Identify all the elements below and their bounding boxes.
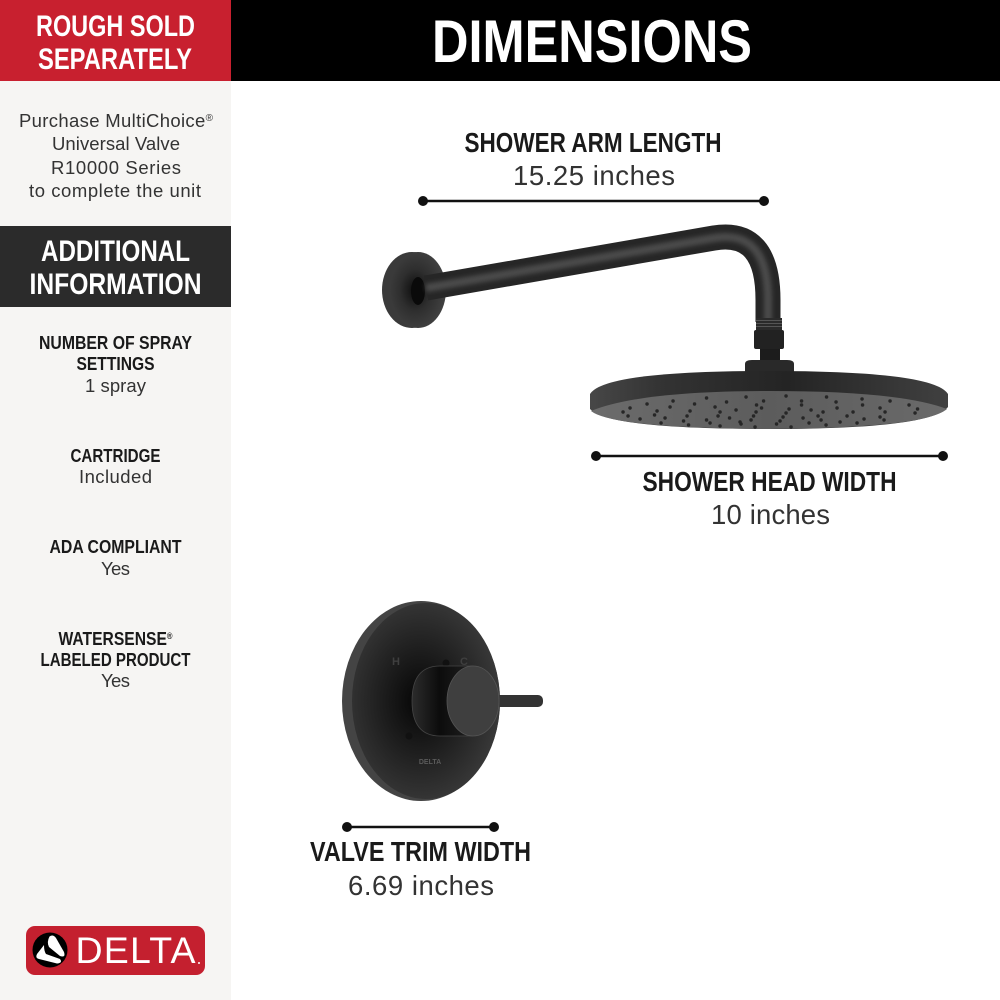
title banner: dimensions: DIMENSIONS (432, 8, 752, 75)
title banner: dimensions (231, 0, 1000, 81)
spec: watersense labeled product: WATERSENSE (58, 628, 187, 649)
dimension: shower arm length: 15.25 inches (513, 160, 675, 191)
wall flange (382, 252, 446, 328)
spray nozzles (623, 396, 918, 427)
dimension: shower head width (591, 451, 948, 530)
banner: rough sold separately: ROUGH SOLD (36, 10, 195, 43)
lever handle (495, 695, 543, 707)
plate markings (392, 656, 468, 766)
dimension: shower arm length: SHOWER ARM LENGTH (464, 127, 722, 158)
threaded connector (745, 318, 794, 372)
spec: cartridge: CARTRIDGE (70, 445, 160, 466)
screws (442, 660, 450, 666)
spec: number of spray settings: 1 spray (85, 375, 147, 396)
dimension: shower head width: 10 inches (711, 499, 830, 530)
shower head rim (590, 371, 948, 429)
plate markings: DELTA (419, 759, 441, 766)
spec: watersense labeled product: LABELED PRODUCT (40, 649, 191, 670)
spec: cartridge (70, 445, 160, 487)
spec: watersense labeled product: Yes (101, 670, 130, 691)
heading: additional information: ADDITIONAL (41, 235, 190, 268)
knob face (447, 666, 499, 736)
dimension: shower arm length (418, 127, 769, 206)
logo: delta (26, 926, 205, 975)
sidebar background (0, 0, 231, 1000)
dimension: valve trim width: 6.69 inches (348, 870, 494, 901)
trim plate (342, 601, 500, 801)
spec: watersense labeled product: ® (167, 631, 173, 641)
banner: rough sold separately (0, 0, 231, 81)
illustration: shower arm and head (382, 237, 948, 429)
text block: purchase note: to complete the unit (29, 180, 201, 201)
text block: purchase note (19, 110, 214, 201)
knob barrel (412, 666, 473, 736)
spec: number of spray settings: SETTINGS (76, 353, 154, 374)
dimension: valve trim width: VALVE TRIM WIDTH (310, 836, 531, 867)
shower head face (591, 391, 947, 429)
spec: ada compliant: ADA COMPLIANT (50, 536, 182, 557)
dimension: shower head width: SHOWER HEAD WIDTH (642, 466, 896, 497)
text block: purchase note: Universal Valve (52, 133, 180, 154)
arm (426, 237, 768, 322)
spec: number of spray settings (39, 332, 193, 396)
banner: rough sold separately: SEPARATELY (38, 43, 192, 76)
plate markings: C (460, 656, 468, 668)
heading: additional information: INFORMATION (30, 268, 202, 301)
spec: watersense labeled product (40, 628, 191, 691)
illustration: valve trim (342, 601, 543, 801)
text block: purchase note: ® (206, 113, 214, 124)
logo: delta: DELTA (76, 929, 196, 971)
plate markings: H (392, 656, 400, 668)
text block: purchase note: Purchase MultiChoice (19, 110, 205, 131)
spec: ada compliant: Yes (101, 558, 130, 579)
spec: cartridge: Included (79, 466, 152, 487)
text block: purchase note: R10000 Series (51, 157, 181, 178)
spec: ada compliant (50, 536, 182, 579)
spec: number of spray settings: NUMBER OF SPRAY (39, 332, 193, 353)
heading: additional information (0, 226, 231, 307)
dimension: valve trim width (310, 822, 531, 901)
